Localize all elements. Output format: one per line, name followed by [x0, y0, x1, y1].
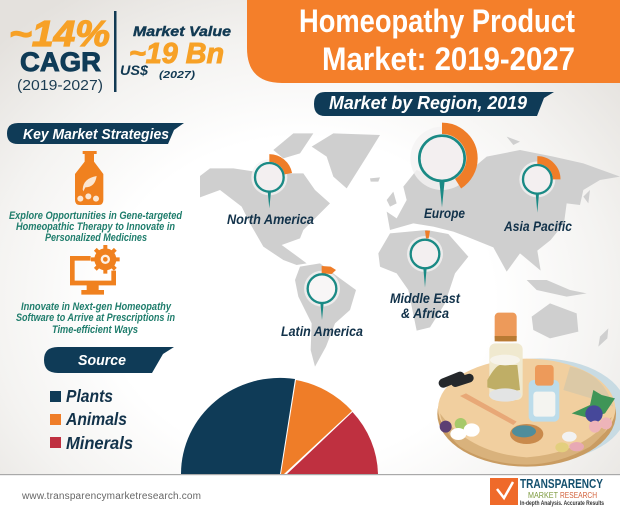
- label: Asia Pacific: Asia Pacific: [503, 218, 572, 234]
- strategy text 1: [9, 210, 182, 244]
- CAGR stat: ~14%: [9, 13, 110, 54]
- marker: Latin America: [304, 266, 340, 320]
- label: Middle East and Africa: Middle East: [390, 290, 461, 306]
- market value stat: US$: [120, 63, 149, 78]
- title text: [299, 3, 575, 77]
- market by region heading: [314, 92, 554, 116]
- website url: www.transparencymarketresearch.com: [21, 491, 201, 502]
- strategy text 1: Explore Opportunities in Gene-targeted: [9, 210, 182, 222]
- small bottle: [529, 365, 559, 422]
- strategy text 2: Time-efficient Ways: [52, 324, 138, 336]
- logo: Transparency Market Research: RESEARCH: [560, 491, 597, 500]
- legend: [50, 386, 133, 453]
- label: Middle East and Africa: & Africa: [401, 305, 449, 321]
- strategy text 2: Innovate in Next-gen Homeopathy: [21, 301, 172, 313]
- strategy text 2: Software to Arrive at Prescriptions in: [16, 312, 175, 324]
- market value stat: ~19 Bn: [129, 38, 224, 70]
- label: Europe: Europe: [424, 205, 465, 221]
- CAGR stat: [9, 13, 110, 94]
- illustration: remedies on wooden tray: [437, 313, 620, 467]
- CAGR stat: (2019-2027): [17, 78, 103, 94]
- CAGR stat: CAGR: [20, 47, 101, 77]
- flowers: [572, 390, 615, 433]
- market value stat: [120, 24, 232, 81]
- key market strategies heading: [7, 123, 184, 144]
- strategy text 1: Homeopathic Therapy to Innovate in: [16, 221, 175, 233]
- pills right: [555, 432, 584, 452]
- black capsules: [437, 370, 475, 389]
- world map: [200, 133, 620, 367]
- marker: Middle East and Africa: [407, 231, 443, 287]
- slice: animals: [281, 380, 352, 474]
- label: North America: North America: [227, 211, 314, 227]
- key market strategies heading: Key Market Strategies: [23, 127, 169, 143]
- slice: minerals: [287, 412, 378, 474]
- pills left: [440, 418, 480, 440]
- strategy text 1: Personalized Medicines: [45, 232, 147, 244]
- title panel: [247, 0, 620, 83]
- footer divider: [0, 474, 620, 475]
- large bottle: [487, 313, 523, 402]
- label: Latin America: Latin America: [281, 323, 363, 339]
- market by region heading: Market by Region, 2019: [329, 93, 527, 113]
- marker: Europe: [410, 127, 474, 207]
- icon: bottle: [75, 151, 103, 205]
- marker: North America: [250, 158, 289, 208]
- marker: Asia Pacific: [518, 160, 557, 213]
- market value stat: Market Value: [133, 24, 232, 39]
- logo: Transparency Market Research: [490, 476, 604, 507]
- source heading: [44, 347, 174, 373]
- legend: plants: Plants: [66, 386, 113, 406]
- pie chart: [181, 378, 378, 474]
- label: Middle East and Africa: [390, 290, 461, 321]
- logo: Transparency Market Research: MARKET: [528, 491, 558, 500]
- legend: animals: Animals: [65, 409, 127, 429]
- title text: Market: 2019-2027: [322, 41, 575, 77]
- wooden stick and spoon: [460, 393, 543, 444]
- market value stat: (2027): [159, 69, 196, 81]
- slice: plants: [181, 378, 295, 474]
- strategy text 2: [16, 301, 175, 336]
- title text: Homeopathy Product: [299, 3, 575, 39]
- legend: minerals: Minerals: [66, 433, 133, 453]
- icon: monitor and gear: [70, 245, 120, 295]
- source heading: Source: [78, 352, 126, 369]
